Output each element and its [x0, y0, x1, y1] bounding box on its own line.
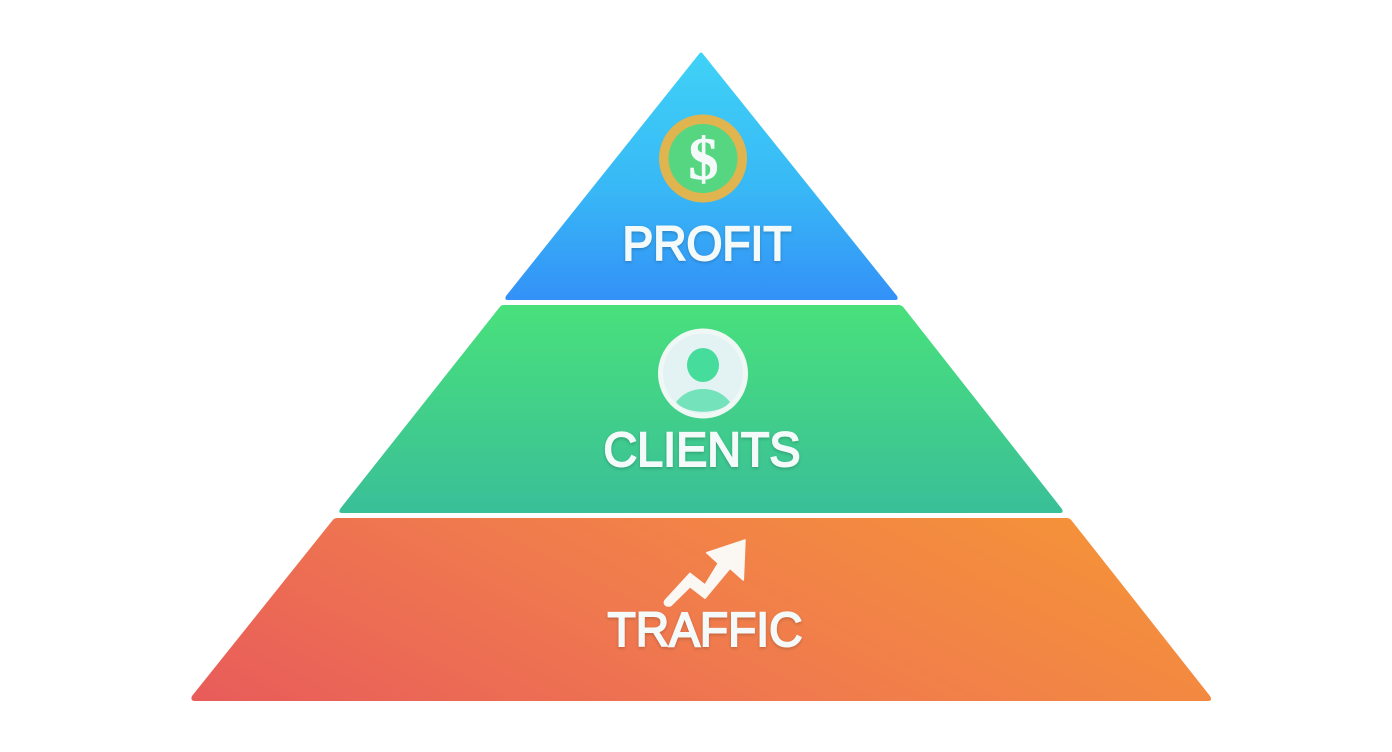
- icon: dollar coin: $: [688, 126, 718, 192]
- clients tier shape: [339, 305, 1063, 513]
- traffic tier shape: [191, 518, 1211, 701]
- heading: clients: CLIENTS: [604, 424, 800, 477]
- icon: dollar coin: [659, 114, 747, 202]
- icon: growth arrow: [664, 540, 745, 606]
- icon: client avatar: [658, 328, 748, 418]
- panel: traffic tier: [191, 518, 1211, 701]
- profit tier shape: [505, 52, 898, 300]
- heading: traffic: TRAFFIC: [608, 604, 802, 657]
- panel: profit tier: [505, 52, 898, 300]
- panel: clients tier: [339, 305, 1063, 513]
- heading: profit: PROFIT: [622, 218, 792, 271]
